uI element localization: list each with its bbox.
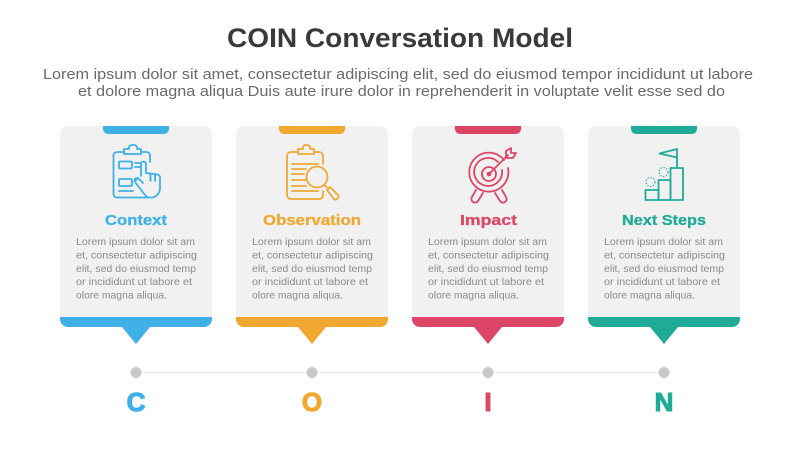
body text xyxy=(76,236,197,302)
heading: Next Steps: Next Steps xyxy=(622,212,706,229)
card background xyxy=(588,126,740,317)
top tab xyxy=(455,126,521,134)
timeline dot C xyxy=(130,367,142,378)
letter N: N xyxy=(655,387,673,417)
body text: or incididunt ut labore et xyxy=(76,276,192,288)
body text: et, consectetur adipiscing xyxy=(428,250,549,262)
body text: Lorem ipsum dolor sit am xyxy=(428,236,547,248)
bottom bar with pointer xyxy=(588,317,740,344)
card background xyxy=(236,126,388,317)
subtitle text xyxy=(43,66,753,100)
body text: et, consectetur adipiscing xyxy=(76,250,197,262)
icon: clipboard with hand xyxy=(114,145,160,198)
body text: et, consectetur adipiscing xyxy=(252,250,373,262)
body text: or incididunt ut labore et xyxy=(252,276,368,288)
icon: target with arrow xyxy=(469,148,516,203)
body text: elit, sed do eiusmod temp xyxy=(252,263,372,275)
body text: olore magna aliqua. xyxy=(252,290,343,302)
panel: impact xyxy=(412,126,564,344)
card background xyxy=(60,126,212,317)
body text: or incididunt ut labore et xyxy=(428,276,544,288)
panel: next steps xyxy=(588,126,740,344)
title: COIN Conversation Model xyxy=(227,23,573,53)
body text: elit, sed do eiusmod temp xyxy=(604,263,724,275)
bottom bar with pointer xyxy=(412,317,564,344)
heading: Impact: Impact xyxy=(460,212,517,229)
icon: clipboard with magnifier xyxy=(287,145,339,200)
body text: elit, sed do eiusmod temp xyxy=(76,263,196,275)
bottom bar with pointer xyxy=(236,317,388,344)
heading: Observation: Observation xyxy=(263,212,361,229)
letter I: I xyxy=(484,387,492,417)
body text: Lorem ipsum dolor sit am xyxy=(604,236,723,248)
heading: Context: Context xyxy=(105,212,167,229)
card background xyxy=(412,126,564,317)
top tab xyxy=(631,126,697,134)
timeline dot O xyxy=(306,367,318,378)
body text: Lorem ipsum dolor sit am xyxy=(76,236,195,248)
top tab xyxy=(279,126,345,134)
timeline dot N xyxy=(658,367,670,378)
timeline dot I xyxy=(482,367,494,378)
body text xyxy=(252,236,373,302)
panel: context xyxy=(60,126,212,344)
body text xyxy=(604,236,725,302)
body text: or incididunt ut labore et xyxy=(604,276,720,288)
subtitle text: Lorem ipsum dolor sit amet, consectetur adipiscing elit, sed do eiusmod tempor incididunt ut labore xyxy=(43,66,753,83)
bottom bar with pointer xyxy=(60,317,212,344)
icon: steps with flag xyxy=(646,149,683,200)
top tab xyxy=(103,126,169,134)
timeline connector line xyxy=(136,372,664,374)
body text xyxy=(428,236,549,302)
letter O: O xyxy=(302,387,322,417)
subtitle text: et dolore magna aliqua Duis aute irure dolor in reprehenderit in voluptate velit esse sed do xyxy=(78,83,725,100)
body text: Lorem ipsum dolor sit am xyxy=(252,236,371,248)
panel: observation xyxy=(236,126,388,344)
body text: elit, sed do eiusmod temp xyxy=(428,263,548,275)
letter C: C xyxy=(127,387,146,417)
body text: olore magna aliqua. xyxy=(428,290,519,302)
body text: olore magna aliqua. xyxy=(76,290,167,302)
body text: olore magna aliqua. xyxy=(604,290,695,302)
body text: et, consectetur adipiscing xyxy=(604,250,725,262)
